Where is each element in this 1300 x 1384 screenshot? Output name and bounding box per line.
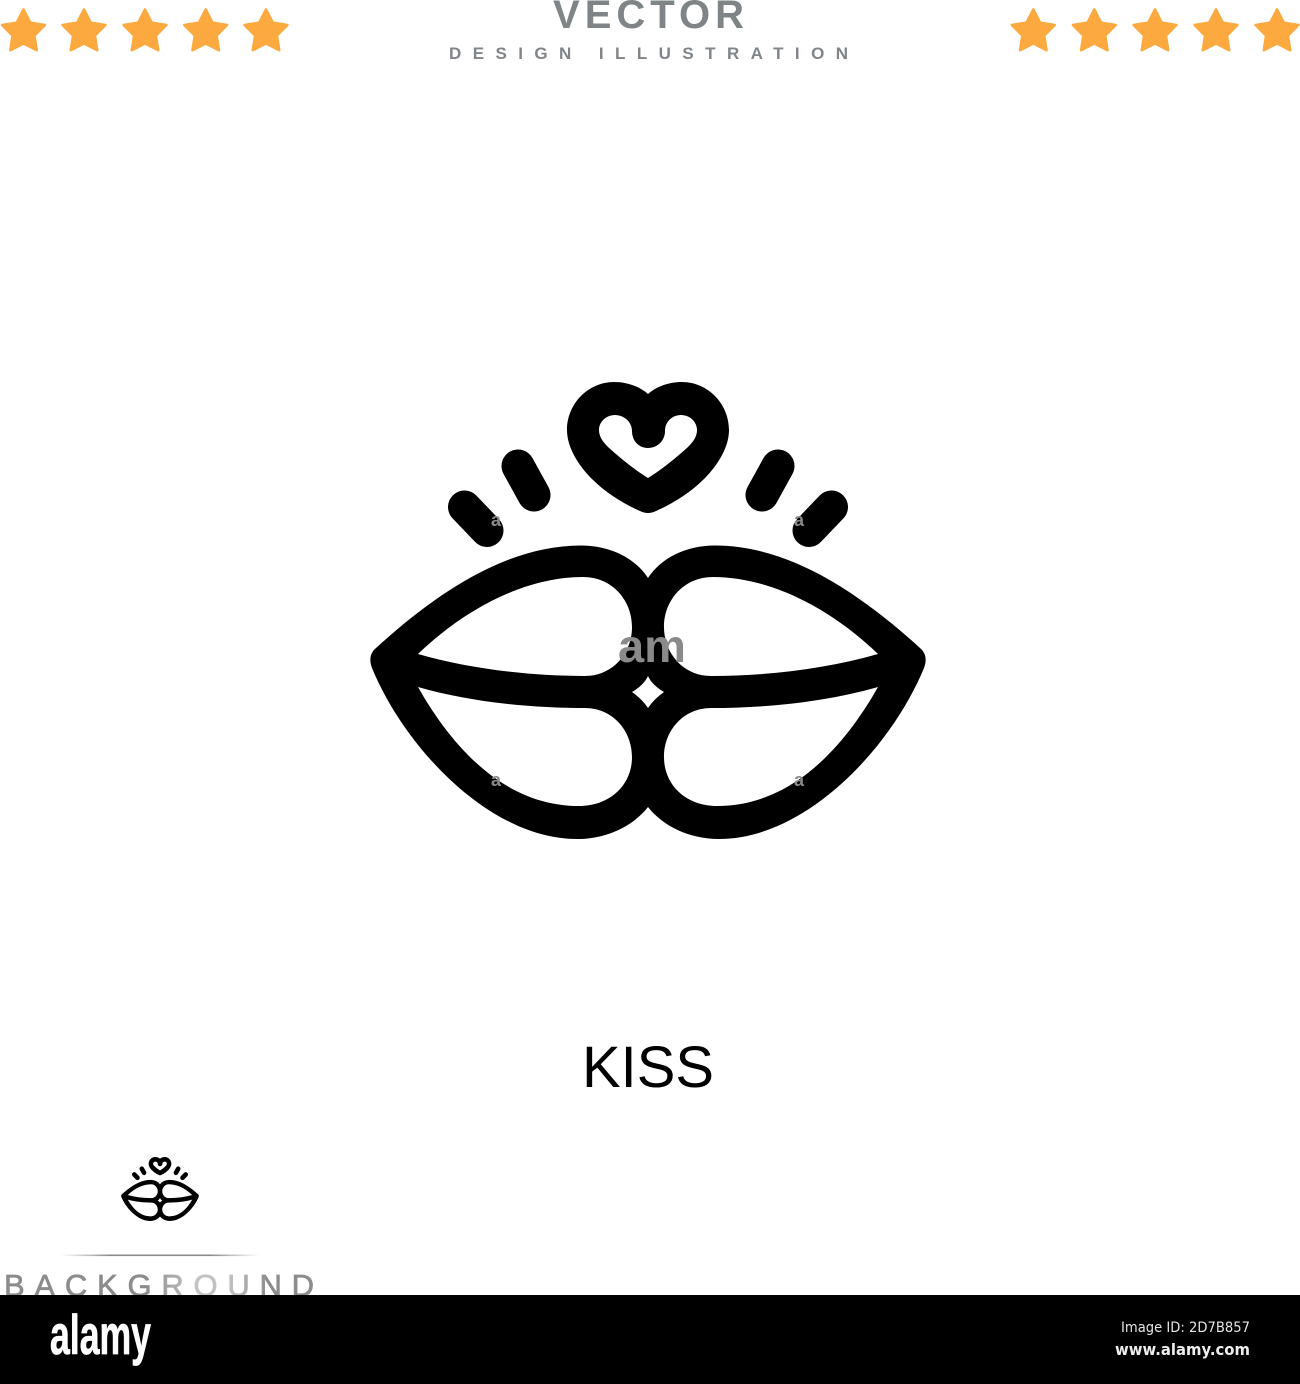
- watermark fragment: a: [794, 770, 805, 790]
- watermark fragment: [491, 510, 805, 790]
- label: BACKGROUND: BACKGROUND: [4, 1268, 314, 1303]
- watermark fragment: a: [491, 770, 502, 790]
- image id: Image ID: 2D7B857: [1121, 1320, 1250, 1336]
- subtitle: DESIGN ILLUSTRATION: DESIGN ILLUSTRATION: [449, 44, 848, 63]
- icon: kissing lips with heart: [370, 382, 926, 839]
- right star rating: [1012, 10, 1298, 50]
- rule above background label: [60, 1254, 260, 1256]
- website: www.alamy.com: [1115, 1340, 1250, 1359]
- left star rating: [2, 10, 287, 50]
- watermark fragment: a: [491, 510, 502, 530]
- watermark fragment: a: [794, 510, 805, 530]
- watermark fragment: am: [618, 620, 686, 672]
- label: KISS: KISS: [582, 1035, 714, 1100]
- icon: small kiss thumbnail: [121, 1157, 199, 1221]
- footer bar: [0, 1295, 1300, 1384]
- alamy logo: alamy: [50, 1303, 151, 1366]
